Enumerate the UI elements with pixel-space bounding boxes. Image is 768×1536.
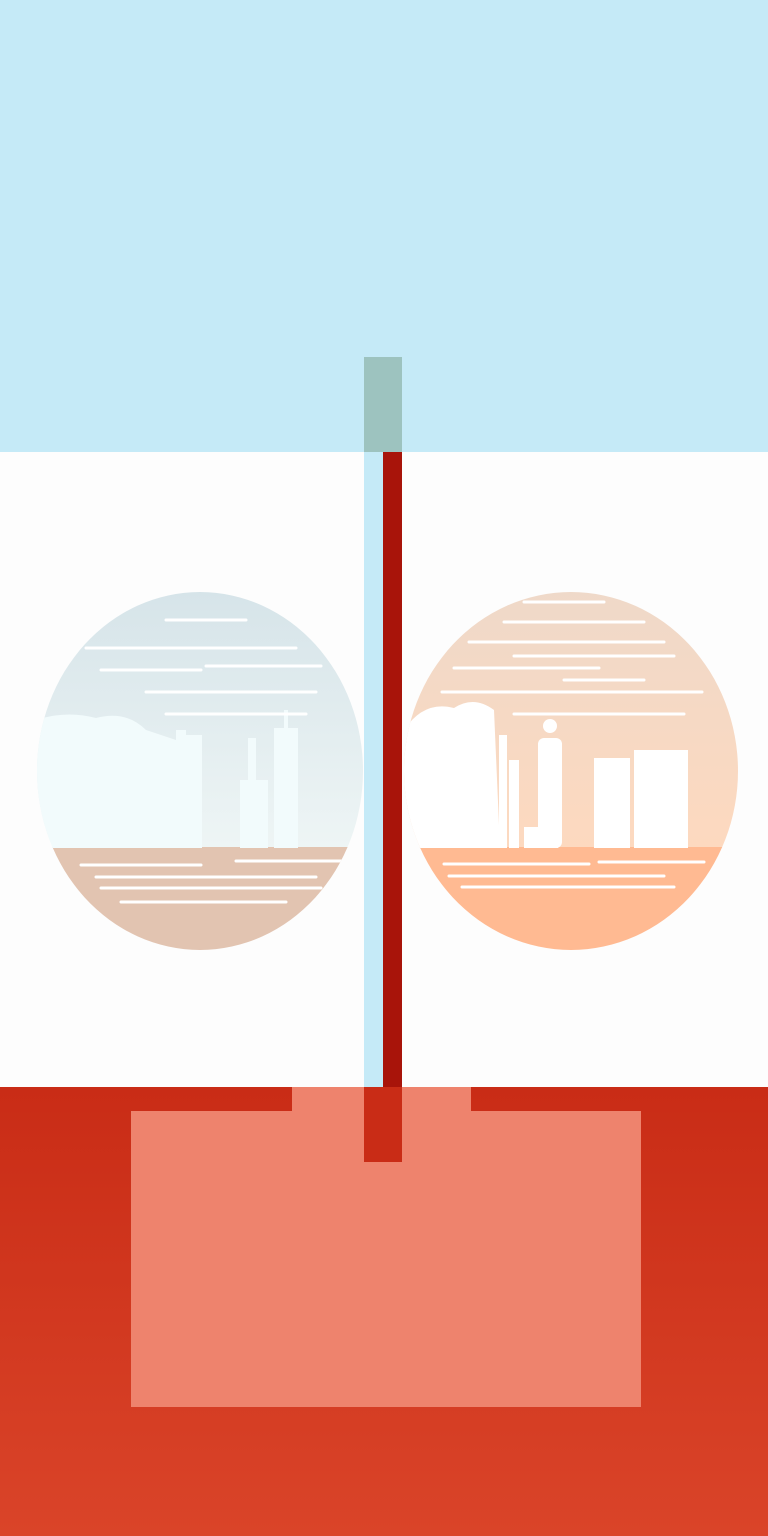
illustration: left cool city circle <box>37 592 363 950</box>
panel: bottom red section <box>0 1087 768 1536</box>
divider bar: central thermometer <box>364 357 402 1162</box>
panel: inner salmon box <box>131 1087 641 1407</box>
illustration: right warm city circle <box>404 592 738 950</box>
panel: top sky band <box>0 0 768 452</box>
